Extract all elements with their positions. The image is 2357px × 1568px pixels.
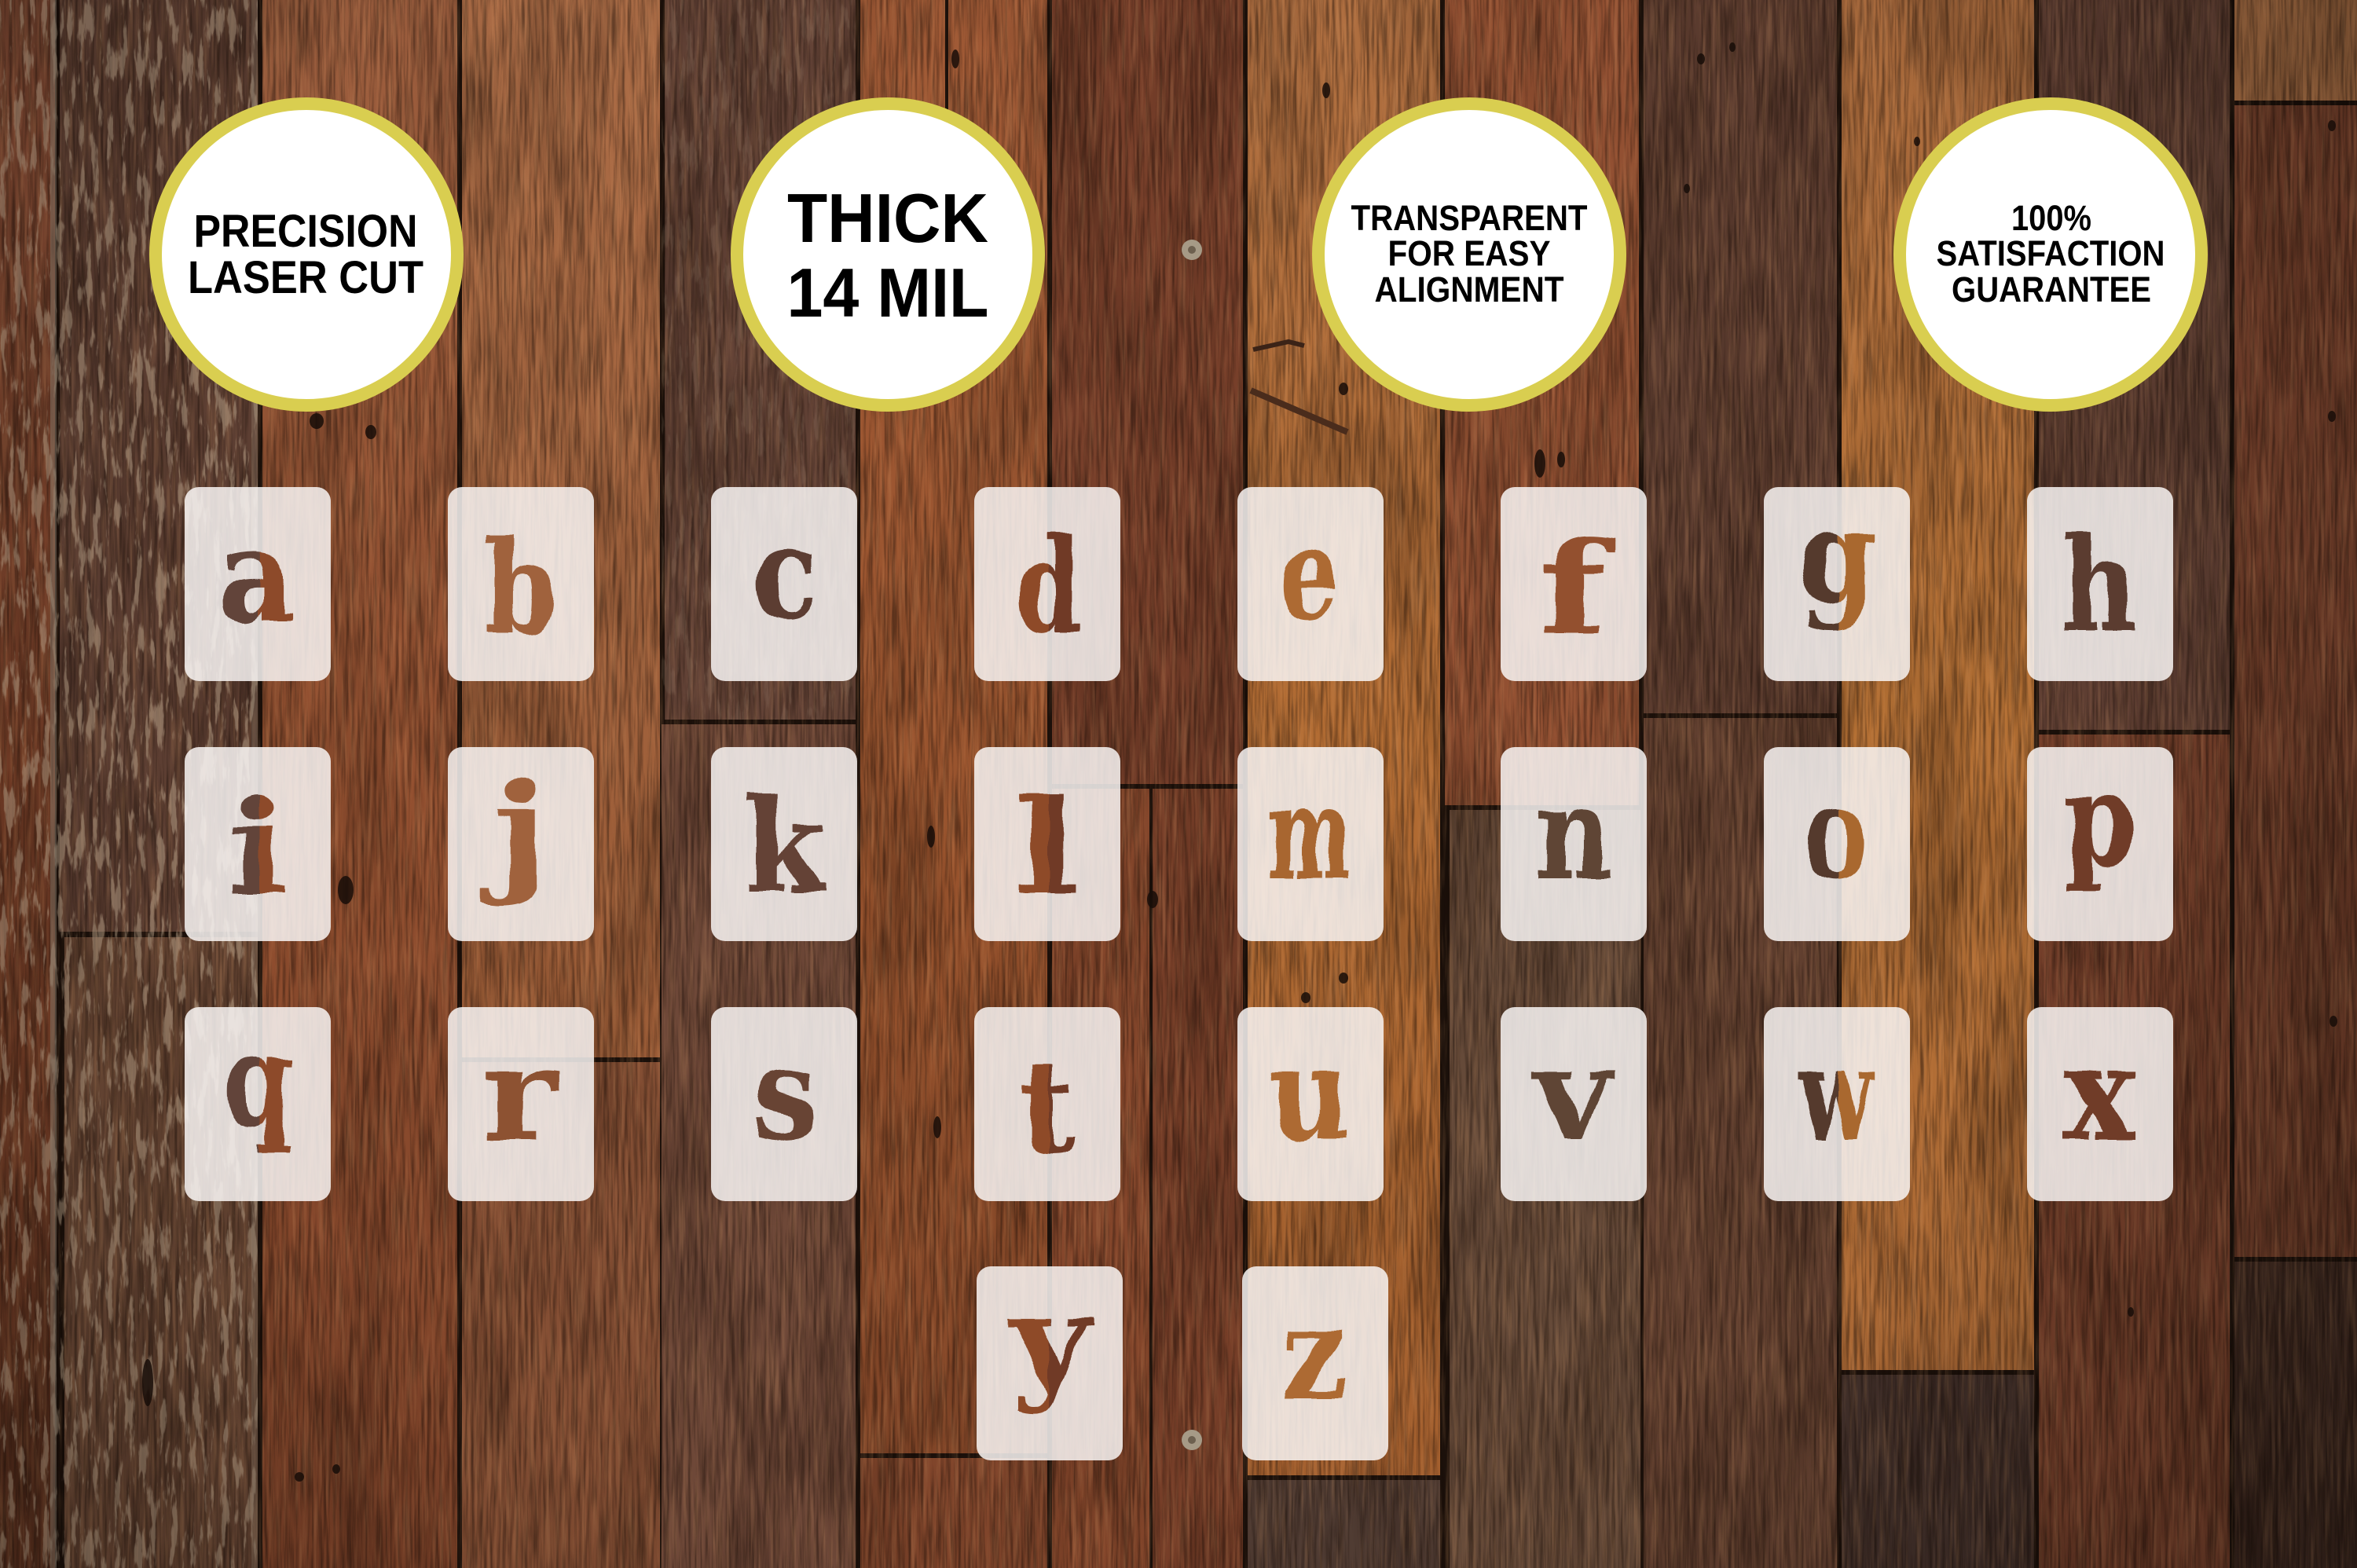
stencil h (2027, 487, 2173, 681)
badge: thick 14 mil: THICK (787, 179, 988, 257)
badge: thick 14 mil: 14 MIL (787, 254, 988, 332)
badge: precision laser cut: PRECISION (193, 206, 418, 257)
stencil s: s (752, 1017, 818, 1170)
badge: transparent for easy alignment: FOR EASY (1387, 233, 1551, 273)
badge: 100% satisfaction guarantee: 100% (2011, 198, 2091, 238)
stencil n (1501, 747, 1647, 941)
stencil w (1764, 1007, 1910, 1201)
stencil t: t (1018, 1031, 1076, 1183)
badge: precision laser cut (156, 104, 457, 405)
stencil l (974, 747, 1120, 941)
badge: transparent for easy alignment: TRANSPARENT (1351, 198, 1587, 238)
stencil c: c (752, 496, 818, 649)
stencil n: n (1535, 757, 1612, 909)
stencil y (977, 1263, 1123, 1460)
stencil z (1242, 1266, 1388, 1460)
stencil f (1501, 487, 1647, 681)
stencil v: v (1531, 1017, 1615, 1170)
stencil y: y (1008, 1263, 1094, 1416)
stencil l: l (1014, 771, 1080, 923)
stencil x (2027, 1007, 2173, 1201)
stencil k: k (743, 770, 827, 922)
badge: transparent for easy alignment (1318, 104, 1620, 405)
stencil o: o (1804, 757, 1868, 909)
stencil u: u (1268, 1017, 1351, 1170)
badge: precision laser cut: LASER CUT (188, 252, 423, 303)
stencil g (1764, 480, 1910, 681)
stencil q: q (223, 1004, 292, 1156)
stencil m (1237, 747, 1384, 941)
stencil r: r (482, 1017, 559, 1170)
stencil q (185, 1004, 331, 1201)
stencil h: h (2062, 508, 2137, 661)
stencil u (1237, 1007, 1384, 1201)
stencil i (185, 747, 331, 941)
stencil j: j (480, 754, 549, 907)
stencil b (448, 487, 594, 681)
stencil f: f (1539, 511, 1615, 664)
badge: 100% satisfaction guarantee: GUARANTEE (1952, 269, 2151, 310)
stencil a (185, 487, 331, 681)
stencil a: a (219, 499, 295, 651)
stencil c (711, 487, 857, 681)
badge: thick 14 mil (737, 104, 1039, 405)
badge: 100% satisfaction guarantee: SATISFACTION (1936, 233, 2165, 273)
stencil t (974, 1007, 1120, 1201)
stencil e (1237, 487, 1384, 681)
stencil z: z (1282, 1277, 1347, 1429)
badge: 100% satisfaction guarantee (1900, 104, 2201, 405)
stencil p: p (2063, 742, 2137, 895)
stencil g: g (1798, 480, 1876, 632)
stencil j (448, 747, 594, 941)
stencil i: i (226, 771, 289, 924)
stencil m: m (1268, 757, 1351, 909)
stencil k (711, 747, 857, 941)
stencil r (448, 1007, 594, 1201)
stencil p (2027, 742, 2173, 941)
stencil e: e (1280, 497, 1338, 650)
stencil s (711, 1007, 857, 1201)
stencil v (1501, 1007, 1647, 1201)
badge: transparent for easy alignment: ALIGNMENT (1375, 269, 1563, 310)
stencil d (974, 487, 1120, 681)
stencil d: d (1015, 510, 1081, 662)
stencil o (1764, 747, 1910, 941)
stencil b: b (484, 511, 558, 663)
stencil w: w (1798, 1017, 1876, 1170)
stencil x: x (2063, 1017, 2137, 1169)
